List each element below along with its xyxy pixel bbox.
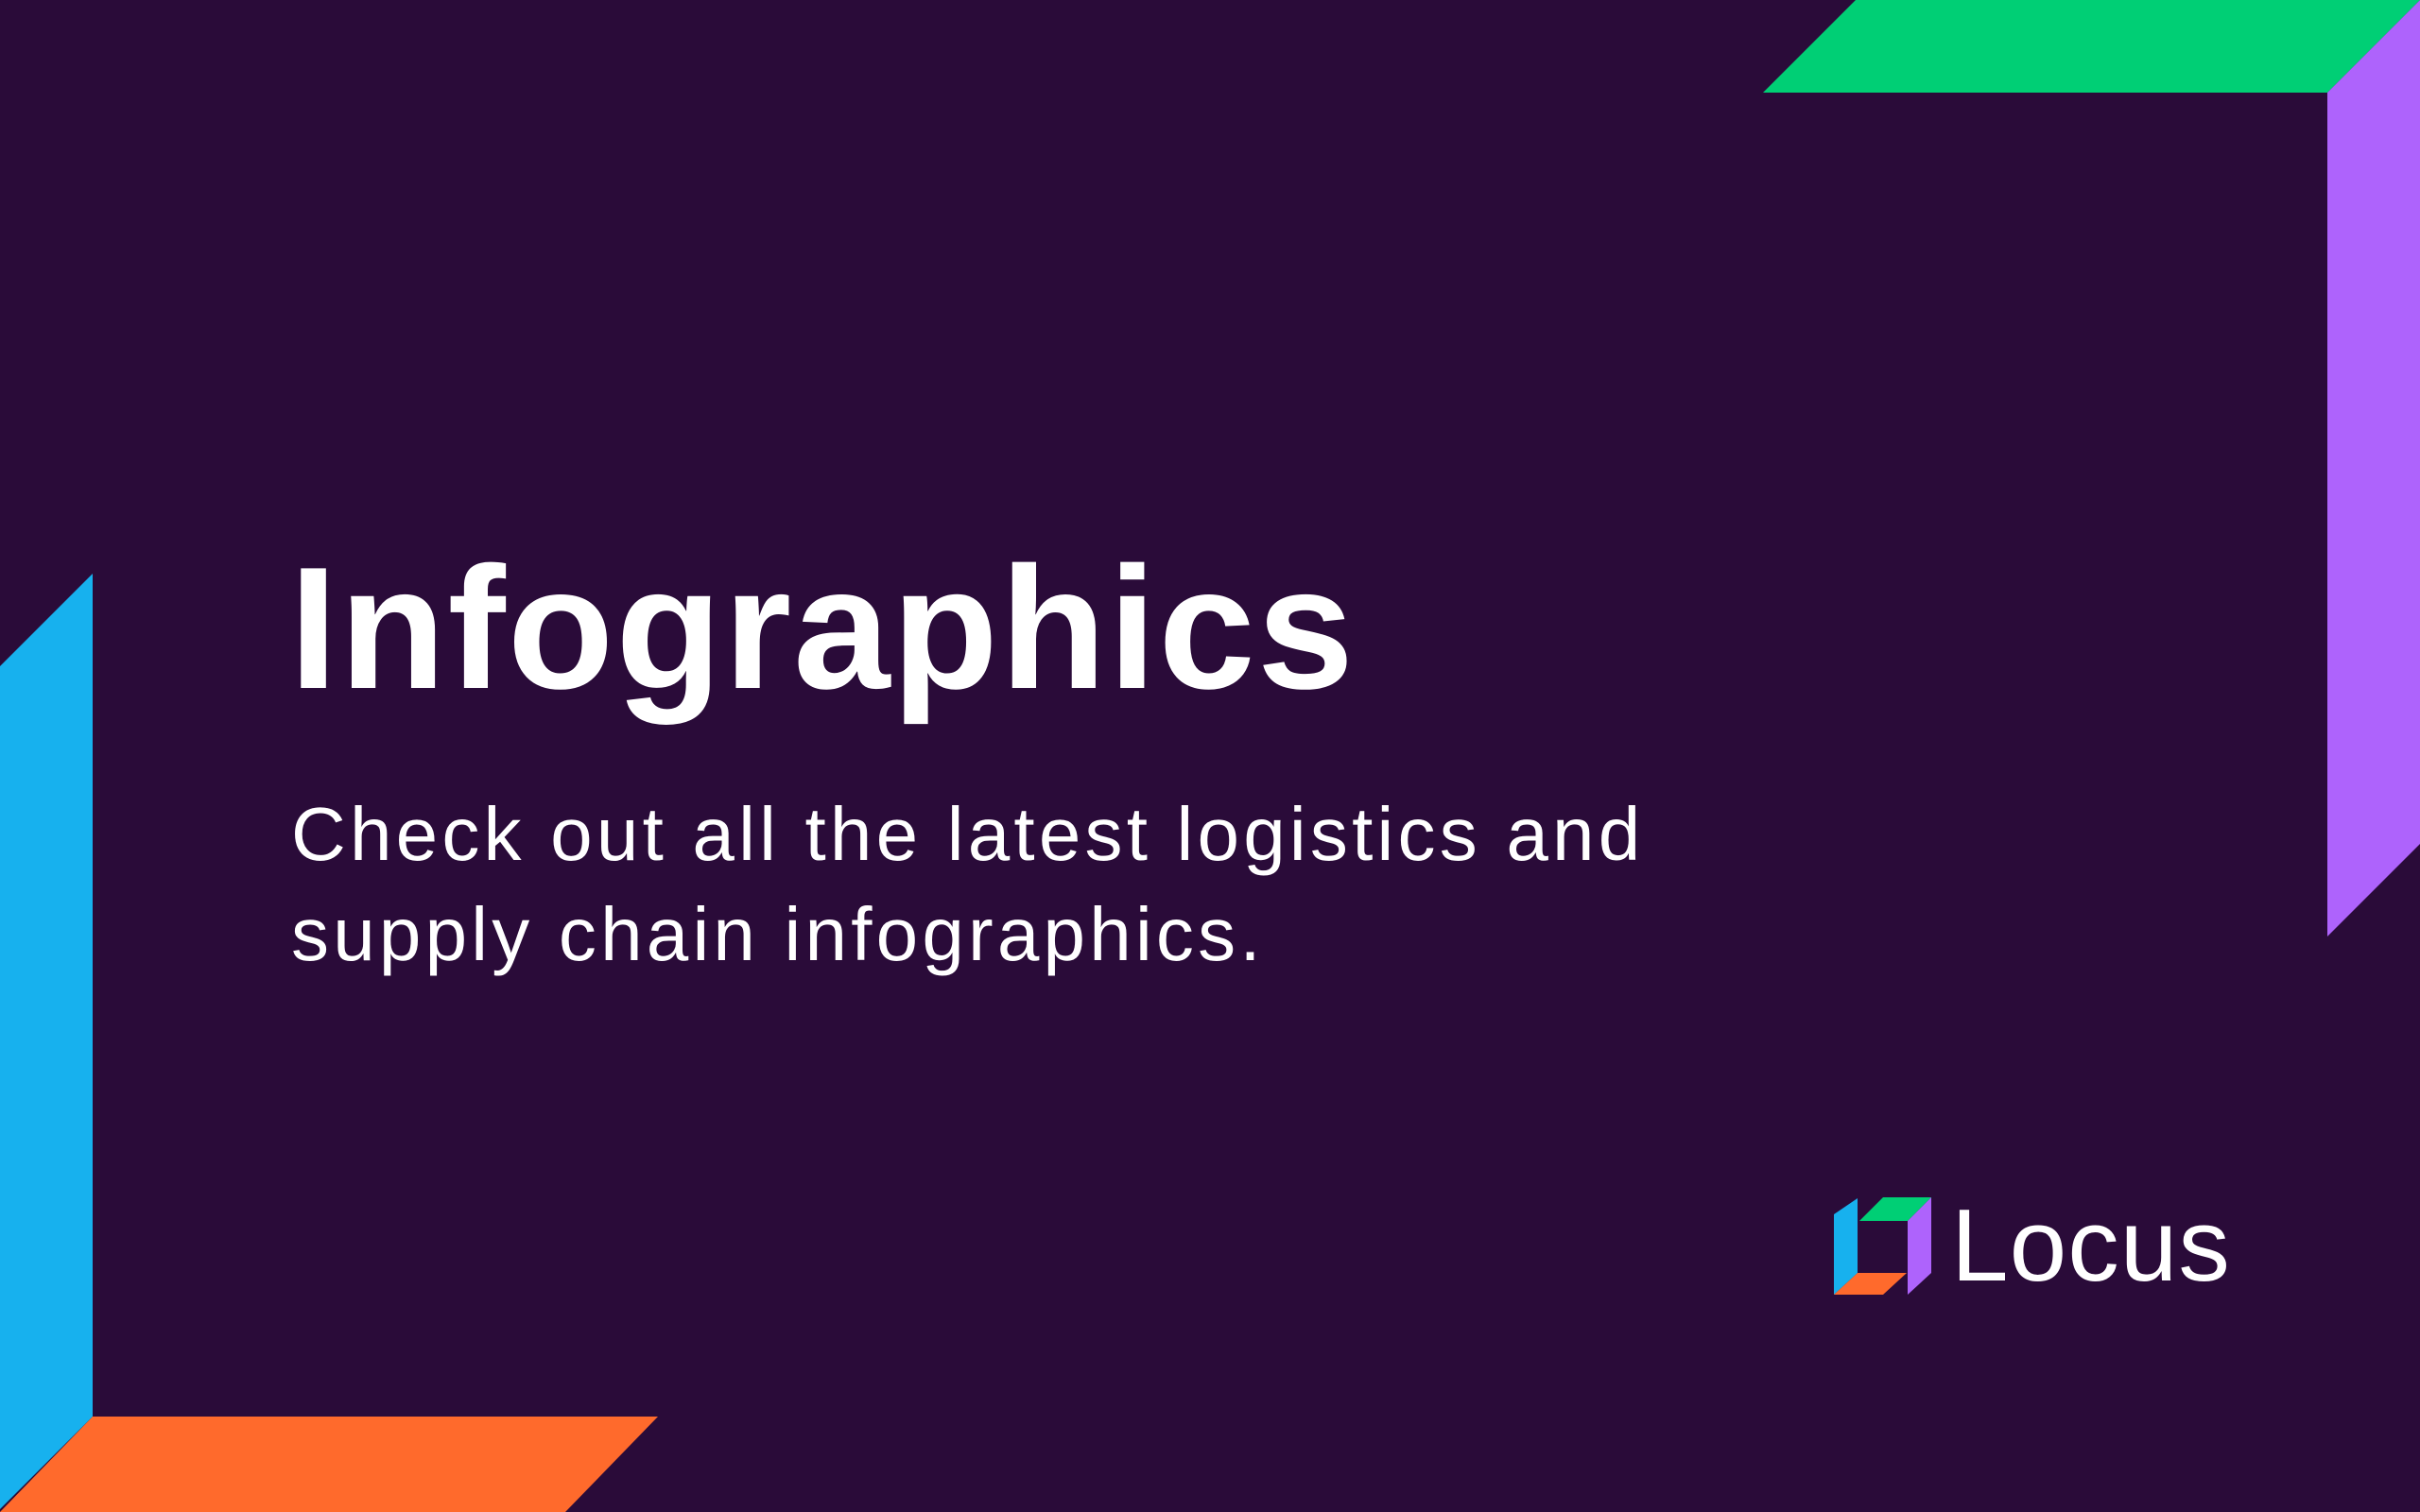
icon: locus cube	[1834, 1197, 1931, 1295]
frame: green top	[1763, 0, 2420, 93]
logo: Locus	[1834, 1188, 2231, 1303]
logo text: Locus	[1951, 1188, 2231, 1303]
subtitle: Check out all the latest logistics and	[291, 792, 1644, 876]
title: Infographics	[289, 530, 1356, 725]
subtitle: supply chain infographics.	[291, 892, 1265, 976]
frame: orange bottom	[0, 1417, 658, 1512]
subtitle	[291, 792, 1644, 976]
frame: blue left	[0, 574, 93, 1509]
frame: purple right	[2327, 0, 2420, 936]
